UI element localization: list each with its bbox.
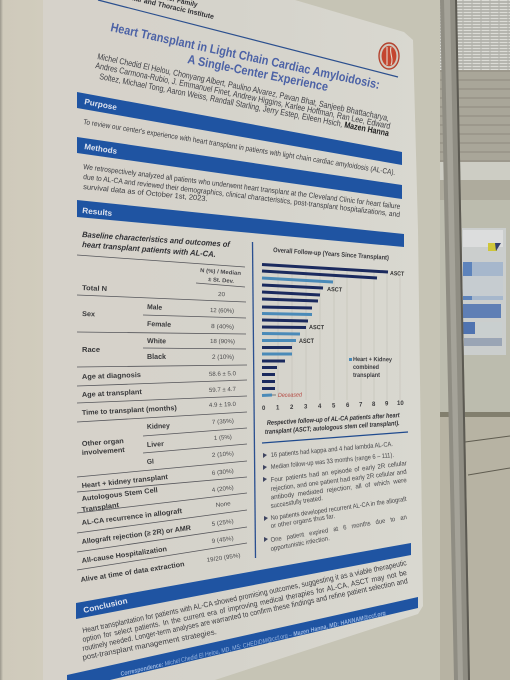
bullet text: antibody mediated rejection; all of which were: [270, 477, 407, 501]
table rules: [77, 255, 247, 570]
table row labels: Age at transplant: [82, 389, 143, 399]
panel: purpose: [77, 92, 402, 177]
table values: 8 (40%): [211, 324, 234, 331]
table values: 20: [218, 292, 226, 298]
poster: [43, 0, 423, 680]
table values: 58.6 ± 5.0: [209, 371, 237, 378]
table row labels: All-cause Hospitalization: [81, 546, 167, 565]
chart annotations: ASCT: [309, 325, 324, 331]
title: A Single-Center Experience: [186, 52, 329, 94]
panel: baseline table: [77, 230, 247, 584]
footer band: correspondence: [67, 597, 418, 680]
table row labels: White: [147, 338, 166, 345]
table values: 1 (5%): [214, 435, 232, 442]
table row labels: [80, 285, 191, 584]
bar chart: overall follow-up: [262, 247, 404, 412]
table row labels: Autologous Stem Cell: [81, 487, 158, 503]
table values: 2 (10%): [212, 355, 234, 361]
far wall poster: [462, 228, 506, 355]
chart annotations: ASCT: [299, 339, 314, 345]
table row labels: Time to transplant (months): [82, 405, 177, 417]
chart axis: 4: [318, 404, 322, 410]
table heading: heart transplant patients with AL-CA.: [82, 240, 216, 259]
table values: None: [216, 501, 232, 509]
panel: methods: [77, 137, 402, 219]
bullet text: One patient expired at 6 months due to an: [270, 514, 408, 544]
bullet text: or other organs thus far.: [270, 513, 336, 530]
table row labels: involvement: [82, 447, 126, 457]
authors: Andres Carmona-Rubio, J. Emmanuel Finet, Andrew Higgins, Karlee Hoffman, Ran Lee, Edward: [95, 60, 392, 131]
chart gridlines: [278, 270, 400, 400]
bullet text: 16 patients had kappa and 4 had lambda AL-CA.: [271, 441, 393, 459]
results band: [77, 200, 404, 247]
table row labels: GI: [147, 459, 154, 466]
panel: methods: Methods: [84, 142, 118, 156]
footer band: correspondence: Correspondence: Michel Chedid El Helou, MD, MS: CHEDIDM@ccf.org – Mazen Hanna, MD: HANNAM@ccf.org: [120, 610, 387, 678]
caption rule: [262, 432, 408, 443]
chart bars: [262, 264, 388, 396]
poster paper sheet: [43, 0, 423, 680]
chart axis: 5: [332, 404, 336, 410]
chart title: Overall Follow-up (Years Since Transplant): [273, 247, 389, 262]
table row labels: Male: [147, 304, 162, 312]
chart axis: 2: [290, 405, 294, 411]
table values: 18 (90%): [210, 339, 235, 345]
panel: methods: We retrospectively analyzed all patients who underwent heart transplant at the Cleveland Clinic for heart failure: [83, 162, 401, 211]
title: Heart Transplant in Light Chain Cardiac Amyloidosis:: [109, 20, 381, 92]
chart axis: 10: [397, 401, 404, 407]
chart axis: 3: [304, 404, 308, 410]
table values: 9 (45%): [211, 536, 234, 545]
table values: [206, 292, 241, 564]
chart legend: [349, 357, 393, 379]
bullet text: rejection, and one patient had early 2R cellular and: [270, 469, 407, 493]
table values: 59.7 ± 4.7: [209, 387, 237, 394]
chart caption: Respective follow-up of AL-CA patients after heart: [267, 412, 401, 427]
table row labels: Total N: [82, 285, 107, 293]
table heading: Baseline characteristics and outcomes of: [82, 230, 231, 249]
table row labels: AL-CA recurrence in allograft: [81, 508, 183, 527]
chart axis: 9: [385, 402, 389, 408]
header rule: [98, 0, 398, 77]
bullet text: Four patients had an episode of early 2R cellular: [270, 460, 408, 484]
table values: 4.9 ± 19.0: [209, 402, 237, 409]
panel: conclusion: [76, 543, 411, 662]
chart annotations: [278, 271, 404, 399]
table values: 2 (10%): [212, 451, 234, 459]
table row labels: Kidney: [147, 423, 170, 431]
panel: conclusion: option for select patients. In the current era of improving medical therapies for AL-CA, ASCT may not be: [82, 568, 408, 644]
authors: Michel Chedid El Helou, Chonyang Albert, Paulino Alvarez, Pavan Bhat, Sanjeeb Bhattacharya,: [97, 51, 390, 123]
bullet text: opportunistic infection.: [270, 535, 331, 553]
panel: methods: due to AL-CA and reviewed their demographics, clinical characteristics, post-transplant hospitalizations, and: [83, 172, 401, 219]
chart axis: 6: [346, 403, 350, 409]
table values: 7 (35%): [212, 419, 234, 426]
chart axis: [262, 401, 404, 412]
chart axis: 1: [276, 406, 280, 412]
table row labels: Female: [147, 321, 171, 329]
results bullets: [263, 441, 408, 553]
table values: 6 (30%): [212, 469, 234, 477]
chart annotations: ASCT: [327, 287, 342, 294]
table row labels: Transplant: [81, 502, 120, 514]
bullet text: No patients developed recurrent AL-CA in the allograft: [270, 496, 407, 522]
logo: [379, 43, 399, 69]
table row labels: Age at diagnosis: [82, 372, 141, 381]
chart caption: transplant (ASCT; autologous stem cell transplant).: [265, 420, 400, 436]
table row labels: Alive at time of data extraction: [80, 561, 185, 584]
panel: purpose: Purpose: [84, 97, 118, 112]
table heading: [82, 230, 231, 259]
panel: conclusion: Heart transplantation for patients with AL-CA showed promising outcomes, suggesting it as a viable therapeutic: [82, 558, 408, 635]
table row labels: Sex: [82, 311, 95, 318]
panel: purpose: To review our center's experience with heart transplant in patients with light chain cardiac amyloidosis (AL-CA).: [83, 117, 396, 177]
chart axis: 8: [372, 402, 376, 408]
pillar: [440, 0, 470, 680]
column divider: [252, 242, 256, 558]
chart legend: combined: [353, 365, 379, 371]
chart caption: [265, 412, 401, 436]
chart annotations: ASCT: [390, 271, 404, 278]
table values: 5 (25%): [211, 519, 234, 528]
table row labels: Black: [147, 354, 166, 361]
panel: conclusion: routinely needed. Longer-term analyses are warranted to confirm these findings and refine patient selection and: [82, 576, 408, 653]
bullet markers: [263, 453, 268, 542]
table column header: ± St. Dev.: [208, 277, 235, 285]
bullet text: Median follow-up was 33 months (range 6 – 111).: [271, 452, 394, 471]
panel: conclusion: Conclusion: [82, 596, 128, 615]
authors: Soltez, Michael Tong, Aaron Weiss, Randall Starling, Jerry Estep, Eileen Hsich, Mazen Hanna: [99, 71, 390, 138]
table values: 19/20 (95%): [206, 553, 241, 564]
table values: 4 (20%): [212, 485, 234, 494]
table row labels: Race: [82, 347, 100, 354]
panel: methods: survival data as of October 1st, 2023.: [83, 182, 208, 203]
panel: conclusion: post-transplant management strategies.: [82, 627, 217, 662]
table row labels: Other organ: [82, 438, 124, 448]
table row labels: Liver: [147, 441, 164, 449]
chart legend: Heart + Kidney: [353, 357, 393, 363]
chart axis: 7: [359, 402, 363, 408]
chart legend: transplant: [353, 373, 380, 379]
table row labels: Allograft rejection (≥ 2R) or AMR: [81, 525, 191, 546]
bullet text: [270, 441, 408, 553]
table row labels: Heart + kidney transplant: [81, 474, 169, 490]
table column header: [200, 268, 242, 285]
table values: 12 (60%): [210, 308, 234, 315]
results band: Results: [82, 206, 113, 218]
table column header: N (%) / Median: [200, 268, 242, 277]
chart annotations: Deceased: [278, 393, 303, 399]
bullet text: successfully treated.: [270, 495, 323, 510]
chart axis: 0: [262, 406, 266, 412]
